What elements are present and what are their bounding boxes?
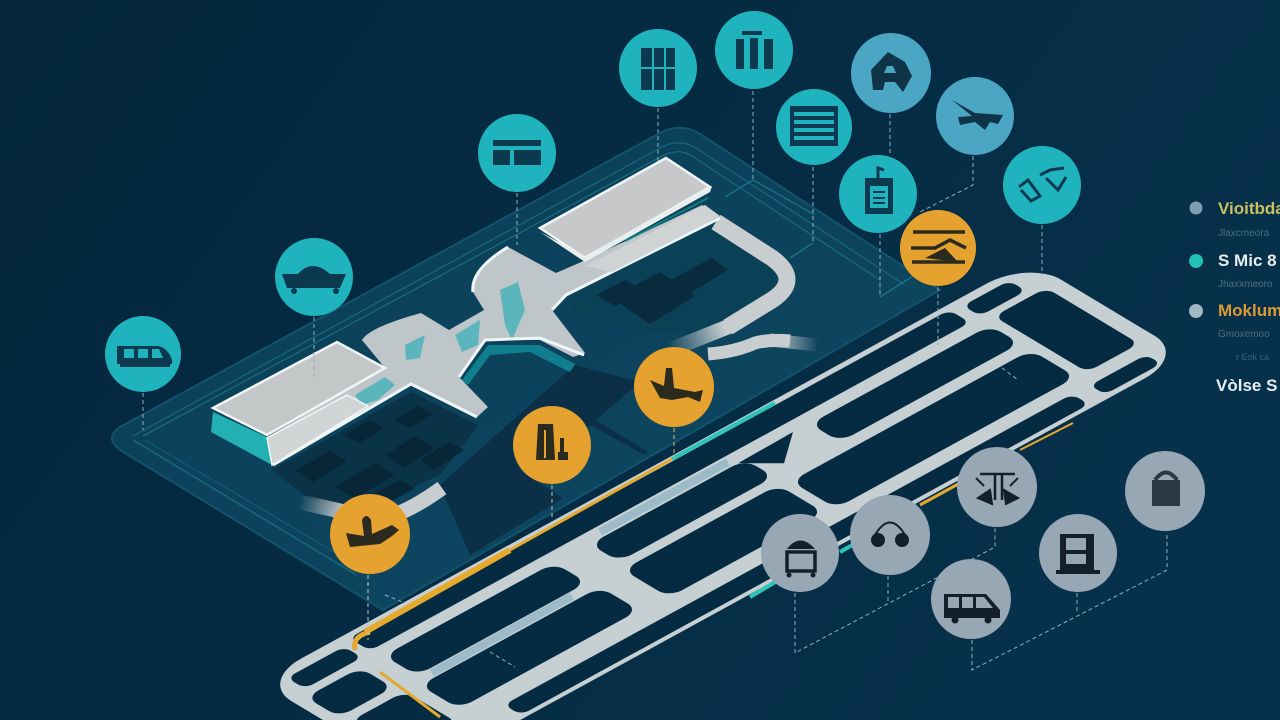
icon: bus (105, 316, 181, 392)
terminal: right roof block (540, 158, 710, 258)
legend item: white: Vòlse S (1216, 376, 1277, 395)
icon: building columns (619, 29, 697, 107)
terminal: inner teal wall (462, 345, 575, 385)
icon: car (275, 238, 353, 316)
legend item: orange: Gmoxemoo (1218, 329, 1270, 340)
terminal: left roof block (213, 342, 385, 435)
icon: conveyor links (1003, 146, 1081, 224)
legend (1189, 199, 1280, 395)
terminal: left front wall (211, 412, 272, 465)
parking area: right (566, 222, 776, 335)
icon: airplane (orange, lower) (330, 494, 410, 574)
legend item: orange: r Eok ca (1236, 352, 1269, 362)
icon: luggage (1125, 451, 1205, 531)
taxiway: blue-grey sections (432, 462, 728, 673)
terminal: left lower slab (267, 395, 368, 465)
taxiway: yellow edge marking (355, 423, 1073, 717)
leader lines (143, 91, 1167, 670)
icon: airplane (orange, upper) (634, 347, 714, 427)
terminal building (211, 158, 720, 465)
icon: aircraft stairs (936, 77, 1014, 155)
icon: ground equipment (orange) (900, 210, 976, 286)
terminal: teal glazing (355, 282, 525, 405)
icon: headset (850, 495, 930, 575)
road: lower service loop (300, 488, 442, 518)
panel: terminal ground plate (112, 128, 940, 610)
road: upper service loop (670, 222, 818, 354)
icon: departures board (776, 89, 852, 165)
icon: baggage cart (761, 514, 839, 592)
icon: fuel tanks (orange) (513, 406, 591, 484)
icon: check-in kiosk (1039, 514, 1117, 592)
runway and taxiway network (259, 260, 1187, 720)
terminal: rim highlights (273, 218, 720, 465)
legend item: teal: Jhaxxmeoro (1218, 279, 1273, 290)
icon: shuttle van (931, 559, 1011, 639)
legend item: teal (1189, 251, 1277, 290)
icon: gate panels (478, 114, 556, 192)
icon: jet bridge (957, 447, 1037, 527)
taxiway: teal edge marking (672, 403, 856, 597)
icon: luggage tag (839, 155, 917, 233)
legend item: teal: S Mic 8 (1218, 251, 1277, 270)
parking area: left (272, 392, 478, 515)
icon: control tower (715, 11, 793, 89)
icon: hangar (851, 33, 931, 113)
legend item: orange (1189, 301, 1280, 362)
legend item: visitors: Jlaxcmeora (1218, 228, 1270, 239)
terminal: central concourse (267, 205, 720, 465)
legend item: visitors (1190, 199, 1280, 239)
